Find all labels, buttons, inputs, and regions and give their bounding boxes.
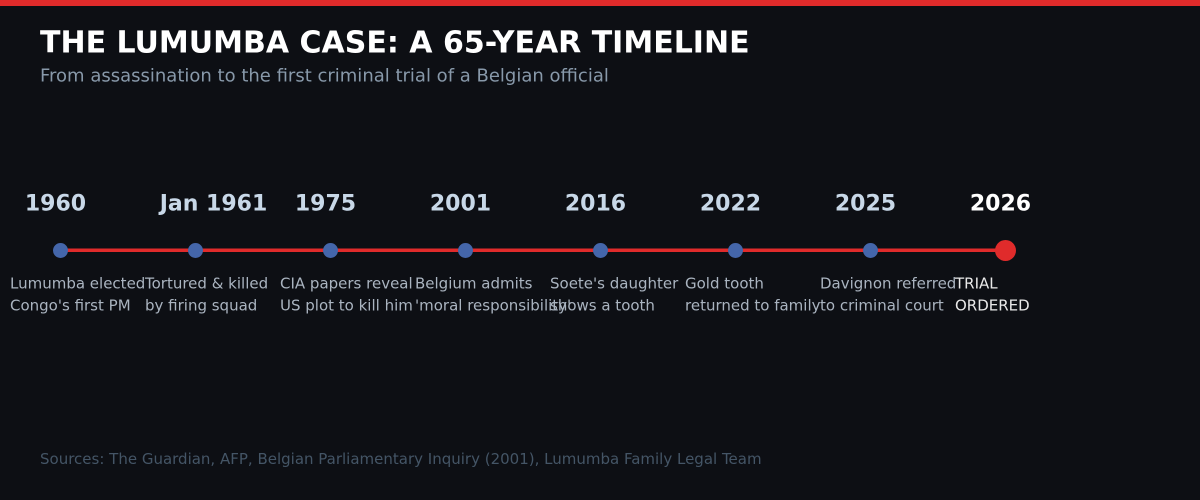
- timeline line: [60, 248, 1005, 252]
- event: 2001: 'moral responsibility': [415, 296, 571, 314]
- event: 2016: 2016: [565, 192, 626, 216]
- event: 2025: Davignon referred: [820, 274, 956, 292]
- event: 2022: [685, 192, 821, 314]
- event: 1960: Congo's first PM: [10, 296, 131, 314]
- event: 2025: 2025: [835, 192, 896, 216]
- event: 2001: [415, 192, 571, 314]
- event: 2026: 2026: [970, 192, 1031, 216]
- event: 2016: Soete's daughter: [550, 274, 679, 292]
- event: 2001: 2001: [430, 192, 491, 216]
- event: 2026: TRIAL: [954, 274, 998, 292]
- event: 2026: ORDERED: [955, 296, 1030, 314]
- event: Jan 1961: Tortured & killed: [144, 274, 268, 292]
- event: 1960: [10, 192, 145, 314]
- event: Jan 1961: by firing squad: [145, 296, 257, 314]
- event: 2022: 2022: [700, 192, 761, 216]
- event: 1960: 1960: [25, 192, 86, 216]
- event: 1975: [280, 192, 413, 314]
- event: 2026: [954, 192, 1031, 314]
- event: 1975: 1975: [295, 192, 356, 216]
- top accent bar: [0, 0, 1200, 6]
- event: 2016: shows a tooth: [550, 296, 655, 314]
- event: 1975: US plot to kill him: [280, 296, 413, 314]
- title: THE LUMUMBA CASE: A 65-YEAR TIMELINE: [40, 26, 750, 60]
- event: 2025: to criminal court: [820, 296, 944, 314]
- event: 2016: [550, 192, 679, 314]
- event: 2022: returned to family: [685, 296, 821, 314]
- event: 2022: Gold tooth: [685, 274, 764, 292]
- event: Jan 1961: [144, 192, 268, 314]
- event: Jan 1961: Jan 1961: [158, 192, 267, 216]
- event: 2025: [820, 192, 956, 314]
- event: 1960: Lumumba elected: [10, 274, 145, 292]
- event: 2001: Belgium admits: [415, 274, 533, 292]
- event: 1975: CIA papers reveal: [280, 274, 413, 292]
- subtitle: From assassination to the first criminal trial of a Belgian official: [40, 66, 609, 86]
- sources: Sources: The Guardian, AFP, Belgian Parliamentary Inquiry (2001), Lumumba Family Legal Team: [40, 450, 762, 468]
